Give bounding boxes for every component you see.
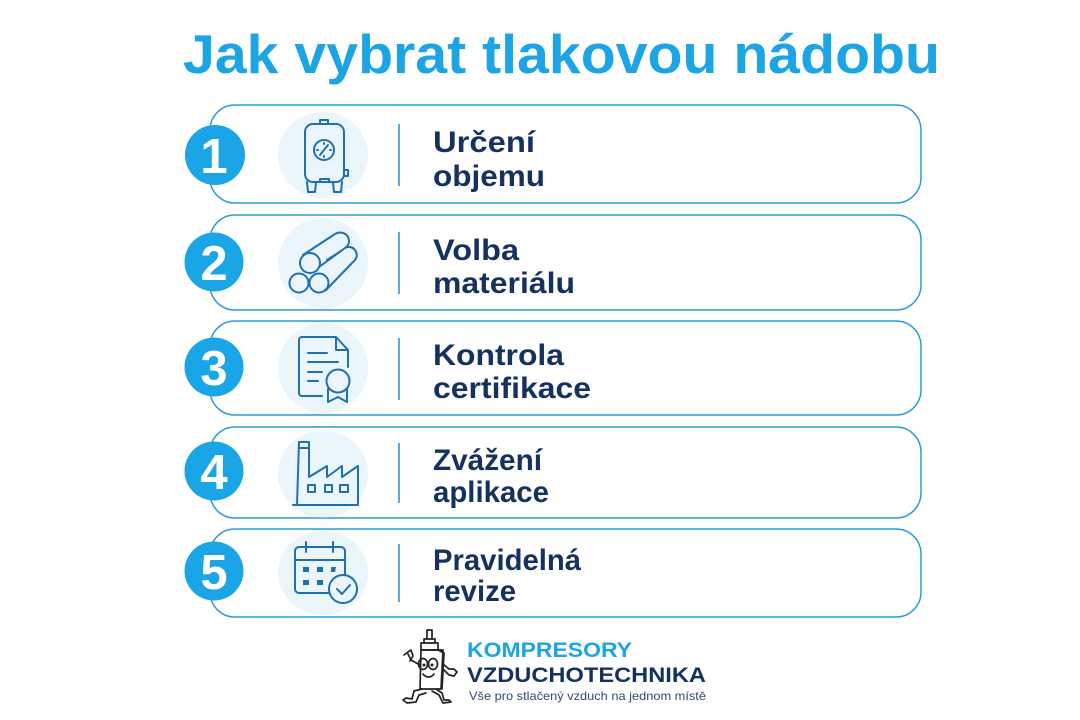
number badge 2: 2 [200, 237, 228, 291]
step 4 label: Zvážení [433, 444, 544, 477]
number badge 1 [185, 125, 245, 185]
icon: pressure tank [278, 112, 368, 198]
icon: pipes [278, 218, 368, 308]
number badge 3: 3 [200, 342, 228, 396]
panel: step 2 [184, 215, 921, 310]
step 2 label: materiálu [433, 267, 575, 300]
step 3 label: certifikace [433, 372, 591, 405]
brand subtitle: VZDUCHOTECHNIKA [467, 664, 706, 687]
panel: step 1 [185, 105, 921, 203]
step 1 label [433, 126, 545, 193]
panel: step 4 [184, 427, 921, 518]
icon: compressor mascot [403, 630, 457, 703]
number badge 1: 1 [200, 130, 228, 184]
divider [398, 338, 400, 400]
icon: factory [278, 430, 368, 518]
step 5 label [433, 544, 581, 608]
step 1 label: objemu [433, 160, 545, 193]
step 3 label [433, 339, 591, 405]
tagline: Vše pro stlačený vzduch na jednom místě [469, 689, 706, 703]
divider [398, 124, 400, 186]
number badge 4: 4 [200, 446, 228, 500]
step 4 label: aplikace [433, 476, 549, 509]
divider [398, 443, 400, 503]
number badge 3 [184, 338, 244, 396]
step 5 label: revize [433, 575, 516, 608]
divider [398, 232, 400, 294]
panel: step 3 [184, 321, 921, 415]
panel: step 5 [184, 529, 921, 617]
step 2 label: Volba [433, 234, 519, 267]
step 2 label [433, 234, 575, 300]
step 4 label [433, 444, 549, 509]
number badge 2 [184, 232, 244, 292]
number badge 5 [184, 542, 244, 600]
number badge 4 [184, 442, 244, 500]
number badge 5: 5 [200, 546, 228, 600]
icon: calendar [278, 531, 368, 615]
brand name: KOMPRESORY [467, 639, 632, 662]
icon: certificate [278, 323, 368, 413]
step 5 label: Pravidelná [433, 544, 581, 577]
step 3 label: Kontrola [433, 339, 564, 372]
title: Jak vybrat tlakovou nádobu [183, 23, 940, 85]
logo [403, 630, 706, 703]
step 1 label: Určení [433, 126, 537, 159]
divider [398, 544, 400, 602]
